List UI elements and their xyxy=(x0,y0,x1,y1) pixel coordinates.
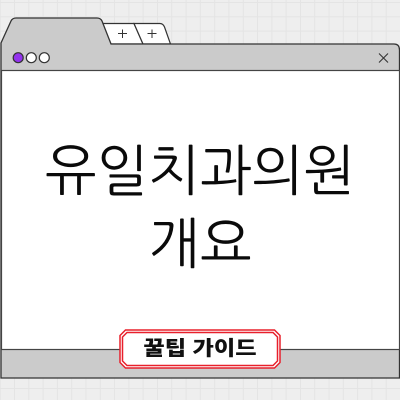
window controls xyxy=(13,53,49,63)
title: 개요 xyxy=(148,216,252,271)
title: 유일치과의원 xyxy=(45,143,355,198)
inactive tabs xyxy=(102,24,170,44)
badge xyxy=(119,329,281,369)
icon: close xyxy=(379,54,388,62)
badge label: 꿀팁 가이드 xyxy=(143,338,257,360)
title xyxy=(45,143,355,271)
content area xyxy=(2,70,400,350)
